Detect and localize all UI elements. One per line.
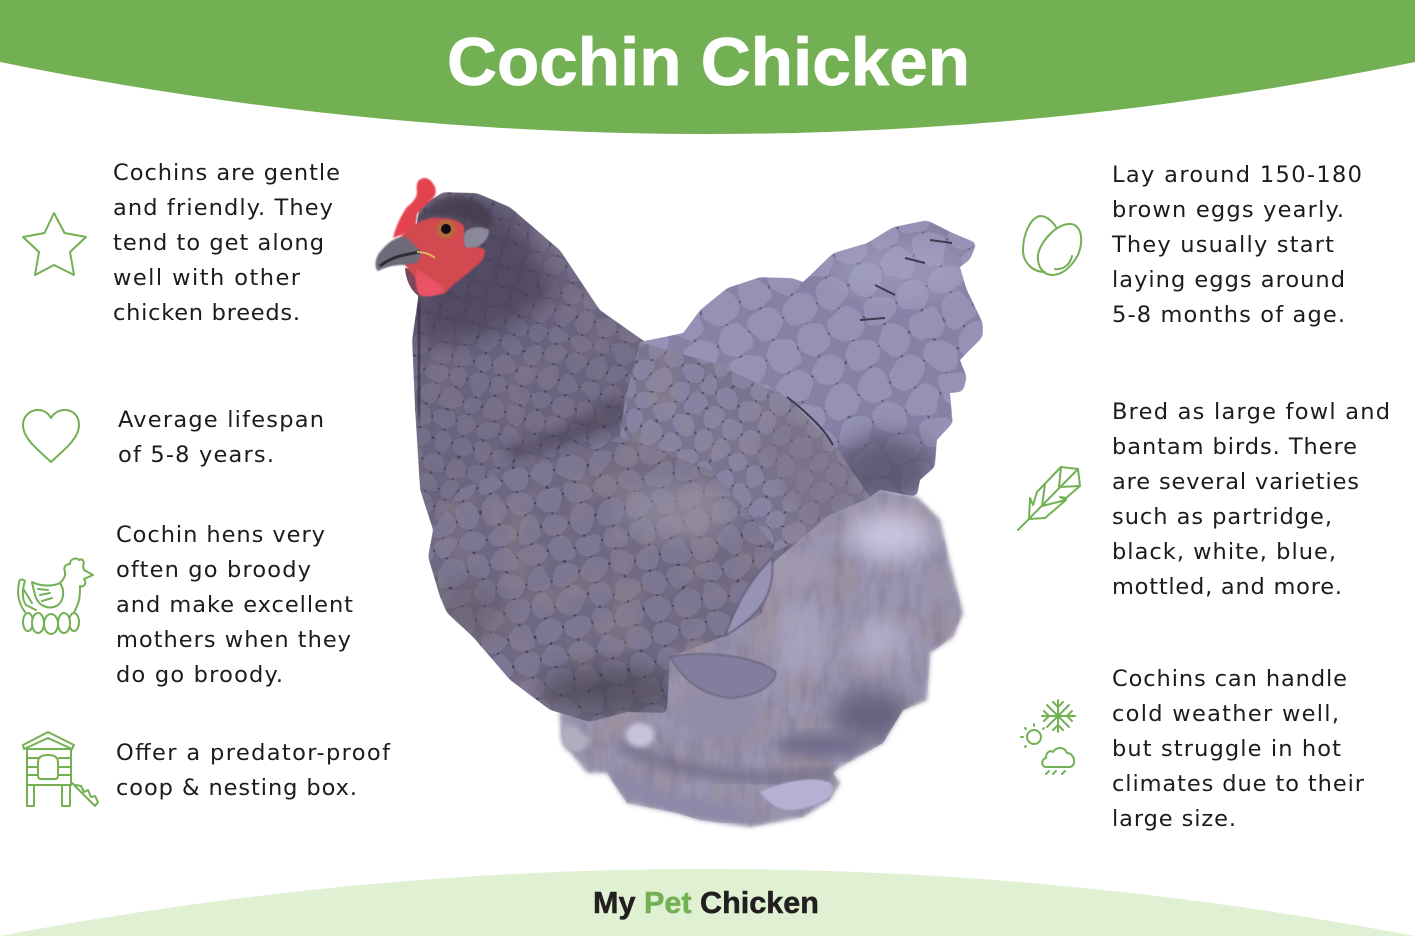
text: coop: coop & nesting box. xyxy=(116,775,357,801)
chicken: fluffy underside xyxy=(550,480,970,830)
text: broody: often go broody xyxy=(116,557,311,583)
text: temperament xyxy=(113,160,340,326)
text: varieties: Bred as large fowl and xyxy=(1112,399,1390,425)
text: climate: Cochins can handle xyxy=(1112,666,1347,692)
text: temperament: and friendly. They xyxy=(113,195,333,221)
text: coop: Offer a predator-proof xyxy=(116,740,391,766)
chicken: comb xyxy=(393,178,436,238)
chicken illustration xyxy=(376,178,1000,830)
text: eggs: Lay around 150-180 xyxy=(1112,162,1362,188)
text: climate: large size. xyxy=(1112,806,1236,832)
text: climate xyxy=(1112,666,1365,832)
text: broody: mothers when they xyxy=(116,627,351,653)
text: broody xyxy=(116,522,353,688)
text: temperament: chicken breeds. xyxy=(113,300,300,326)
icon: feather xyxy=(1018,467,1080,530)
text: varieties: mottled, and more. xyxy=(1112,574,1342,600)
panel: eggs xyxy=(1023,162,1362,328)
text: climate: but struggle in hot xyxy=(1112,736,1341,762)
text: eggs: They usually start xyxy=(1111,232,1334,258)
panel: lifespan xyxy=(23,407,324,468)
text: lifespan: of 5-8 years. xyxy=(118,442,274,468)
panel: varieties xyxy=(1018,399,1390,600)
panel: predator-proof coop xyxy=(23,732,391,806)
text: coop xyxy=(116,740,391,801)
chicken: ear lobe xyxy=(464,227,489,248)
text: eggs: 5-8 months of age. xyxy=(1112,302,1345,328)
chicken: wing tip feathers xyxy=(725,558,772,636)
chicken: red face xyxy=(392,218,485,296)
text: varieties: black, white, blue, xyxy=(1112,539,1336,565)
icon: hen on eggs xyxy=(18,559,93,634)
text: climate: climates due to their xyxy=(1112,771,1365,797)
chicken: wattle xyxy=(416,268,444,296)
chicken: feather line xyxy=(787,397,833,445)
text: broody: Cochin hens very xyxy=(116,522,325,548)
chicken: eye xyxy=(436,220,456,238)
chicken: wing xyxy=(428,438,773,721)
text: climate: cold weather well, xyxy=(1112,701,1339,727)
footer banner xyxy=(0,869,1415,936)
text: eggs xyxy=(1111,162,1362,328)
text: eggs: brown eggs yearly. xyxy=(1112,197,1344,223)
title: Cochin Chicken xyxy=(447,24,970,100)
header banner xyxy=(0,0,1415,134)
icon: star xyxy=(23,213,86,275)
text: varieties: such as partridge, xyxy=(1112,504,1332,530)
chicken: beak xyxy=(376,237,422,271)
chicken: back feathers xyxy=(620,333,875,552)
icon: weather xyxy=(1021,700,1075,774)
text: temperament: well with other xyxy=(113,265,301,291)
text: varieties: are several varieties xyxy=(1112,469,1359,495)
text: varieties xyxy=(1112,399,1390,600)
text: lifespan xyxy=(118,407,324,468)
text: eggs: laying eggs around xyxy=(1112,267,1345,293)
icon: chicken coop xyxy=(23,732,98,806)
panel: broody hens xyxy=(18,522,353,688)
text: broody: do go broody. xyxy=(116,662,283,688)
chicken: throat xyxy=(405,268,420,297)
chicken: tail feathers xyxy=(641,220,983,498)
icon: eggs xyxy=(1023,216,1081,275)
panel: gentle and friendly xyxy=(23,160,340,326)
chicken: side feather flap xyxy=(670,654,776,698)
text: varieties: bantam birds. There xyxy=(1112,434,1357,460)
text: lifespan: Average lifespan xyxy=(118,407,324,433)
panel: climate xyxy=(1021,666,1365,832)
text: temperament: Cochins are gentle xyxy=(113,160,340,186)
footer logo wordmark: My Pet Chicken xyxy=(593,885,819,920)
chicken: feathered body xyxy=(412,192,983,722)
chicken: crown shadow xyxy=(417,196,491,228)
icon: heart xyxy=(23,410,79,462)
chicken: neck and breast xyxy=(412,192,800,720)
text: broody: and make excellent xyxy=(116,592,353,618)
chicken: beak dark line xyxy=(380,252,420,266)
chicken: beak corner yellow xyxy=(417,252,435,258)
text: temperament: tend to get along xyxy=(113,230,324,256)
